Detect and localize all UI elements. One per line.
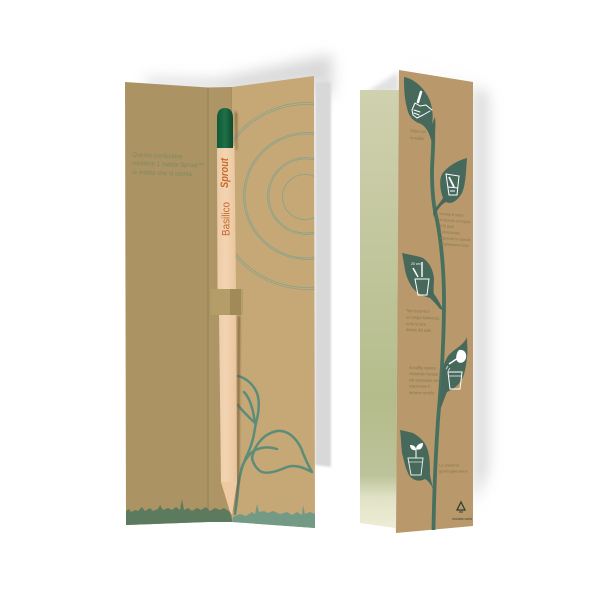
step 4 text: nel sottovaso per — [409, 378, 440, 383]
icon: hand with pencil — [412, 92, 432, 118]
intro text: Questa confezione — [132, 152, 184, 161]
icon: recycling symbol: riciclata carta — [452, 517, 472, 521]
step 3 text: diretta del sole — [406, 327, 432, 333]
step 2 text: seguendo la capsula — [439, 236, 471, 242]
panel: kraft instruction sheet — [396, 70, 473, 533]
panel: right flap — [232, 76, 315, 528]
card: open left folder — [125, 76, 315, 528]
step 3 text: evita la luce — [406, 321, 427, 327]
panel: centre spine — [208, 87, 232, 522]
step 4 text — [409, 365, 440, 395]
shadows behind the cards — [145, 54, 488, 505]
leaf 2 — [433, 158, 467, 217]
step 5 text: Le piantine — [439, 462, 460, 468]
step 5 text: germoglieranno — [439, 468, 469, 474]
paper band holding the pencil — [211, 289, 243, 315]
pencil — [217, 108, 237, 515]
icon: recycling symbol — [452, 502, 472, 521]
icon: seedling in pot — [408, 443, 423, 475]
icon: watering can over pot — [446, 350, 466, 389]
step 1 text: Sfoltisci con — [410, 128, 426, 134]
plant line drawing — [235, 376, 312, 514]
step 1 text — [410, 128, 426, 141]
panel: cream inner flap — [360, 90, 399, 533]
panel: left flap — [125, 82, 208, 525]
intro text: la matita che si pianta — [132, 169, 192, 178]
step 2 text: di 30 gradi — [439, 224, 454, 229]
intro text: contiene 1 matita Sprout™ — [132, 160, 204, 170]
pencil shadow — [233, 110, 240, 512]
concentric circles graphic — [233, 102, 314, 290]
card: instructions folder — [360, 70, 473, 533]
icon: pencil in glass — [446, 174, 459, 195]
step 2 text: Immergi la matita — [439, 212, 464, 218]
step 3 text: Tieni la pianta in — [406, 308, 431, 314]
step 4 text: Annaffia spesso — [409, 365, 437, 370]
intro text — [132, 152, 204, 178]
pencil body — [217, 146, 237, 515]
step 4 text: mantenere il — [409, 384, 430, 389]
variety name: Basilico — [220, 202, 232, 236]
pencil tip — [221, 482, 237, 515]
step 5 text — [439, 462, 469, 474]
product infographic scene — [125, 51, 494, 533]
leaf 4 — [440, 337, 467, 408]
grass strip — [126, 499, 315, 528]
green seed capsule — [217, 108, 233, 148]
step 2 text: inclinando ad angolo — [439, 218, 471, 224]
step 2 text: e direzionala — [439, 230, 460, 235]
step 4 text: terreno umido — [409, 390, 435, 395]
fold lines — [207, 88, 209, 522]
step 4 text: versando l'acqua — [409, 371, 439, 377]
leaf 5 — [400, 430, 433, 489]
step 2 text: completamente sotto — [439, 242, 469, 248]
step 1 text: la matita — [410, 135, 425, 141]
step 2 text — [439, 212, 471, 248]
plant stem — [432, 128, 444, 530]
leaf 1 — [404, 77, 435, 142]
step 3 text — [406, 308, 440, 333]
step 3 text: un luogo luminoso, — [406, 315, 440, 321]
icon: pencil and flower pot: 20 cm — [411, 262, 421, 266]
leaf 3 — [402, 253, 443, 310]
brand script: Sprout — [219, 157, 231, 188]
